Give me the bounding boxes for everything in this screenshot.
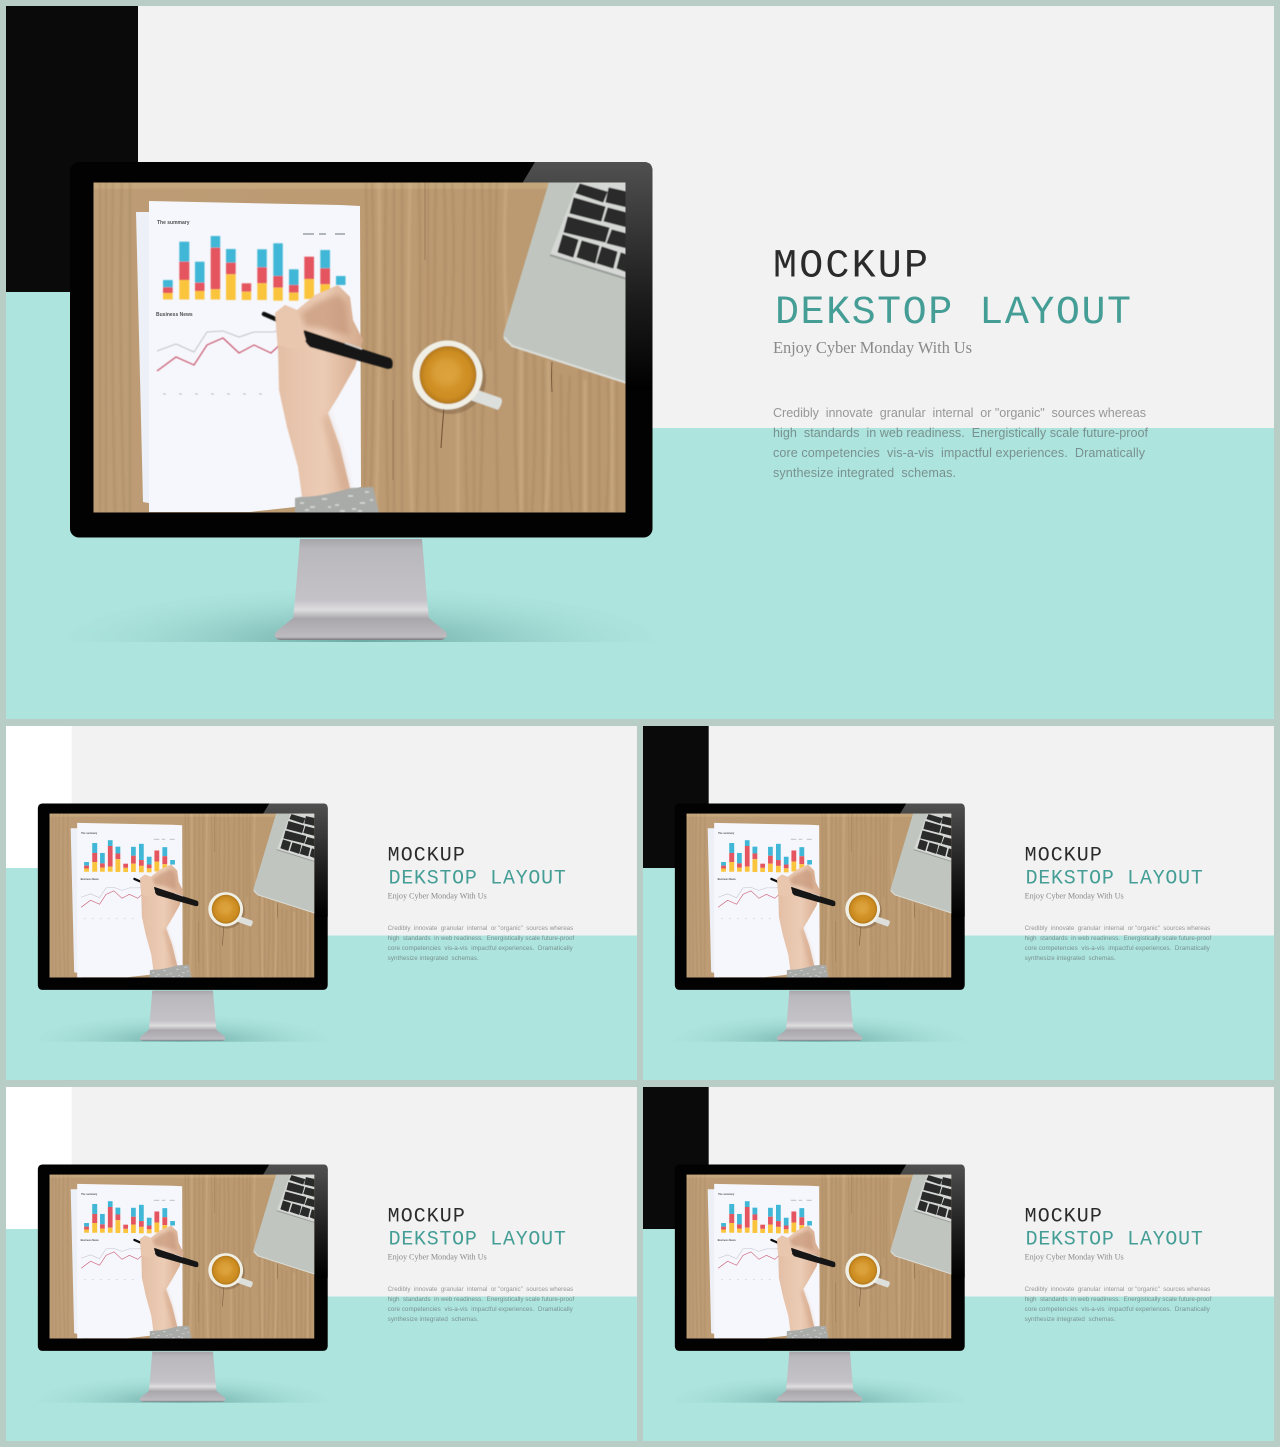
coffee cup bbox=[412, 340, 502, 414]
slide 2 light background bbox=[6, 726, 637, 1080]
slide 2 teal floor bbox=[6, 868, 637, 1080]
slide 5 body paragraph: Credibly innovate granular internal or "organic" sources whereas bbox=[1025, 1286, 1210, 1293]
monitor shadow bbox=[66, 588, 656, 696]
slide 5 title: MOCKUP bbox=[1025, 1204, 1102, 1227]
slide 3 subtitle in teal: DEKSTOP LAYOUT bbox=[1026, 866, 1203, 889]
coffee bbox=[420, 346, 476, 404]
slide 5 subtitle in teal: DEKSTOP LAYOUT bbox=[1026, 1227, 1203, 1250]
slide 2: small layout with white block bbox=[6, 726, 637, 1080]
slide 4 body paragraph: high standards in web readiness. Energistically scale future-proof bbox=[388, 1296, 575, 1303]
paper sheets with printed charts bbox=[136, 201, 361, 512]
slide 2 subtitle in teal: DEKSTOP LAYOUT bbox=[389, 866, 566, 889]
slide 4 body paragraph: synthesize integrated schemas. bbox=[388, 1316, 479, 1323]
slide 2 title: MOCKUP bbox=[388, 843, 465, 866]
fist shading bbox=[301, 294, 350, 336]
wooden desk bbox=[93, 180, 626, 513]
slide 1 body paragraph: synthesize integrated schemas. bbox=[773, 466, 956, 480]
slide 4 monitor bbox=[36, 1164, 329, 1430]
slide 5 tagline: Enjoy Cyber Monday With Us bbox=[1025, 1252, 1124, 1261]
slide 3 body paragraph: high standards in web readiness. Energistically scale future-proof bbox=[1025, 935, 1212, 942]
slide 5 body paragraph: core competencies vis-a-vis impactful experiences. Dramatically bbox=[1025, 1306, 1211, 1313]
sleeve bbox=[295, 487, 379, 513]
pen barrel bbox=[304, 330, 393, 369]
line chart bbox=[157, 328, 283, 394]
cup shadow bbox=[414, 344, 486, 414]
slide 1 light background bbox=[6, 6, 1274, 719]
slide 2 body paragraph: core competencies vis-a-vis impactful experiences. Dramatically bbox=[388, 945, 574, 952]
slide 2 white corner block bbox=[6, 726, 72, 868]
slide 2 body paragraph: Credibly innovate granular internal or "organic" sources whereas bbox=[388, 925, 573, 932]
bezel glare bbox=[523, 162, 652, 390]
slide 5 teal floor bbox=[643, 1229, 1274, 1441]
slide 2 monitor bbox=[36, 803, 329, 1069]
slide 1 teal floor bbox=[6, 292, 1274, 719]
slide 5: small layout with black block bbox=[643, 1087, 1274, 1441]
slide 4 body paragraph: Credibly innovate granular internal or "organic" sources whereas bbox=[388, 1286, 573, 1293]
slide 2 tagline: Enjoy Cyber Monday With Us bbox=[388, 891, 487, 900]
cup handle bbox=[470, 388, 502, 410]
slide 3 black corner block bbox=[643, 726, 709, 868]
slide 3: small layout with black block bbox=[643, 726, 1274, 1080]
slide 4 white corner block bbox=[6, 1087, 72, 1229]
slide 4 teal floor bbox=[6, 1229, 637, 1441]
second paper heading: Business News bbox=[156, 312, 193, 318]
slide 3 monitor bbox=[673, 803, 966, 1069]
slide 1: large desktop layout bbox=[6, 6, 1274, 719]
hand and wrist bbox=[275, 285, 363, 497]
sleeve pattern bbox=[300, 492, 373, 511]
back paper sheet bbox=[136, 212, 160, 512]
paper heading: The summary bbox=[157, 220, 190, 226]
slide 4 body paragraph bbox=[388, 1286, 575, 1323]
slide 4 tagline: Enjoy Cyber Monday With Us bbox=[388, 1252, 487, 1261]
slide 2 body paragraph: synthesize integrated schemas. bbox=[388, 955, 479, 962]
slide 3 title: MOCKUP bbox=[1025, 843, 1102, 866]
pen highlight bbox=[345, 343, 362, 349]
keyboard edge bbox=[550, 255, 627, 279]
slide 3 body paragraph: core competencies vis-a-vis impactful experiences. Dramatically bbox=[1025, 945, 1211, 952]
slide 3 light background bbox=[643, 726, 1274, 1080]
slide 4 light background bbox=[6, 1087, 637, 1441]
slide 4 title: MOCKUP bbox=[388, 1204, 465, 1227]
slide 2 body paragraph: high standards in web readiness. Energistically scale future-proof bbox=[388, 935, 575, 942]
monitor stand bbox=[275, 539, 447, 640]
front paper sheet bbox=[149, 201, 361, 512]
slide 1 body paragraph: Credibly innovate granular internal or "organic" sources whereas bbox=[773, 406, 1146, 420]
slide 4: small layout with white block bbox=[6, 1087, 637, 1441]
laptop body bbox=[503, 182, 627, 383]
screen photo: desk with charts, hand, coffee and laptop bbox=[93, 180, 627, 513]
slide 1 title: MOCKUP bbox=[773, 244, 928, 290]
slide 2 body paragraph bbox=[388, 925, 575, 962]
slide 4 subtitle in teal: DEKSTOP LAYOUT bbox=[389, 1227, 566, 1250]
slide 1 tagline: Enjoy Cyber Monday With Us bbox=[773, 338, 972, 357]
slide 1 body paragraph: high standards in web readiness. Energistically scale future-proof bbox=[773, 426, 1148, 440]
slide 1 subtitle in teal: DEKSTOP LAYOUT bbox=[775, 291, 1131, 336]
slide 3 body paragraph: synthesize integrated schemas. bbox=[1025, 955, 1116, 962]
slide 3 teal floor bbox=[643, 868, 1274, 1080]
laptop bbox=[503, 182, 627, 383]
slide 5 body paragraph: high standards in web readiness. Energistically scale future-proof bbox=[1025, 1296, 1212, 1303]
slide 4 body paragraph: core competencies vis-a-vis impactful experiences. Dramatically bbox=[388, 1306, 574, 1313]
cup rim bbox=[412, 340, 482, 410]
wrist shading bbox=[322, 397, 350, 490]
stacked bar chart bbox=[163, 236, 346, 301]
slide 5 body paragraph: synthesize integrated schemas. bbox=[1025, 1316, 1116, 1323]
coffee crema bbox=[431, 358, 461, 386]
desktop monitor mockup bbox=[66, 162, 656, 696]
slide 1 black corner block bbox=[6, 6, 138, 292]
slide 5 light background bbox=[643, 1087, 1274, 1441]
keyboard keys bbox=[558, 184, 627, 272]
slide 5 black corner block bbox=[643, 1087, 709, 1229]
slide 3 body paragraph bbox=[1025, 925, 1212, 962]
slide 5 body paragraph bbox=[1025, 1286, 1212, 1323]
hand holding pen bbox=[264, 285, 393, 513]
slide 1 body paragraph bbox=[773, 406, 1148, 480]
keyboard tray bbox=[550, 182, 627, 279]
slide 3 tagline: Enjoy Cyber Monday With Us bbox=[1025, 891, 1124, 900]
chart legend bbox=[303, 233, 345, 235]
slide 1 body paragraph: core competencies vis-a-vis impactful experiences. Dramatically bbox=[773, 446, 1146, 460]
pen tip bbox=[264, 314, 280, 321]
slide 3 body paragraph: Credibly innovate granular internal or "organic" sources whereas bbox=[1025, 925, 1210, 932]
index finger over pen bbox=[275, 305, 306, 350]
slide 5 monitor bbox=[673, 1164, 966, 1430]
laptop front edge bbox=[504, 337, 627, 383]
monitor bezel bbox=[70, 162, 652, 538]
